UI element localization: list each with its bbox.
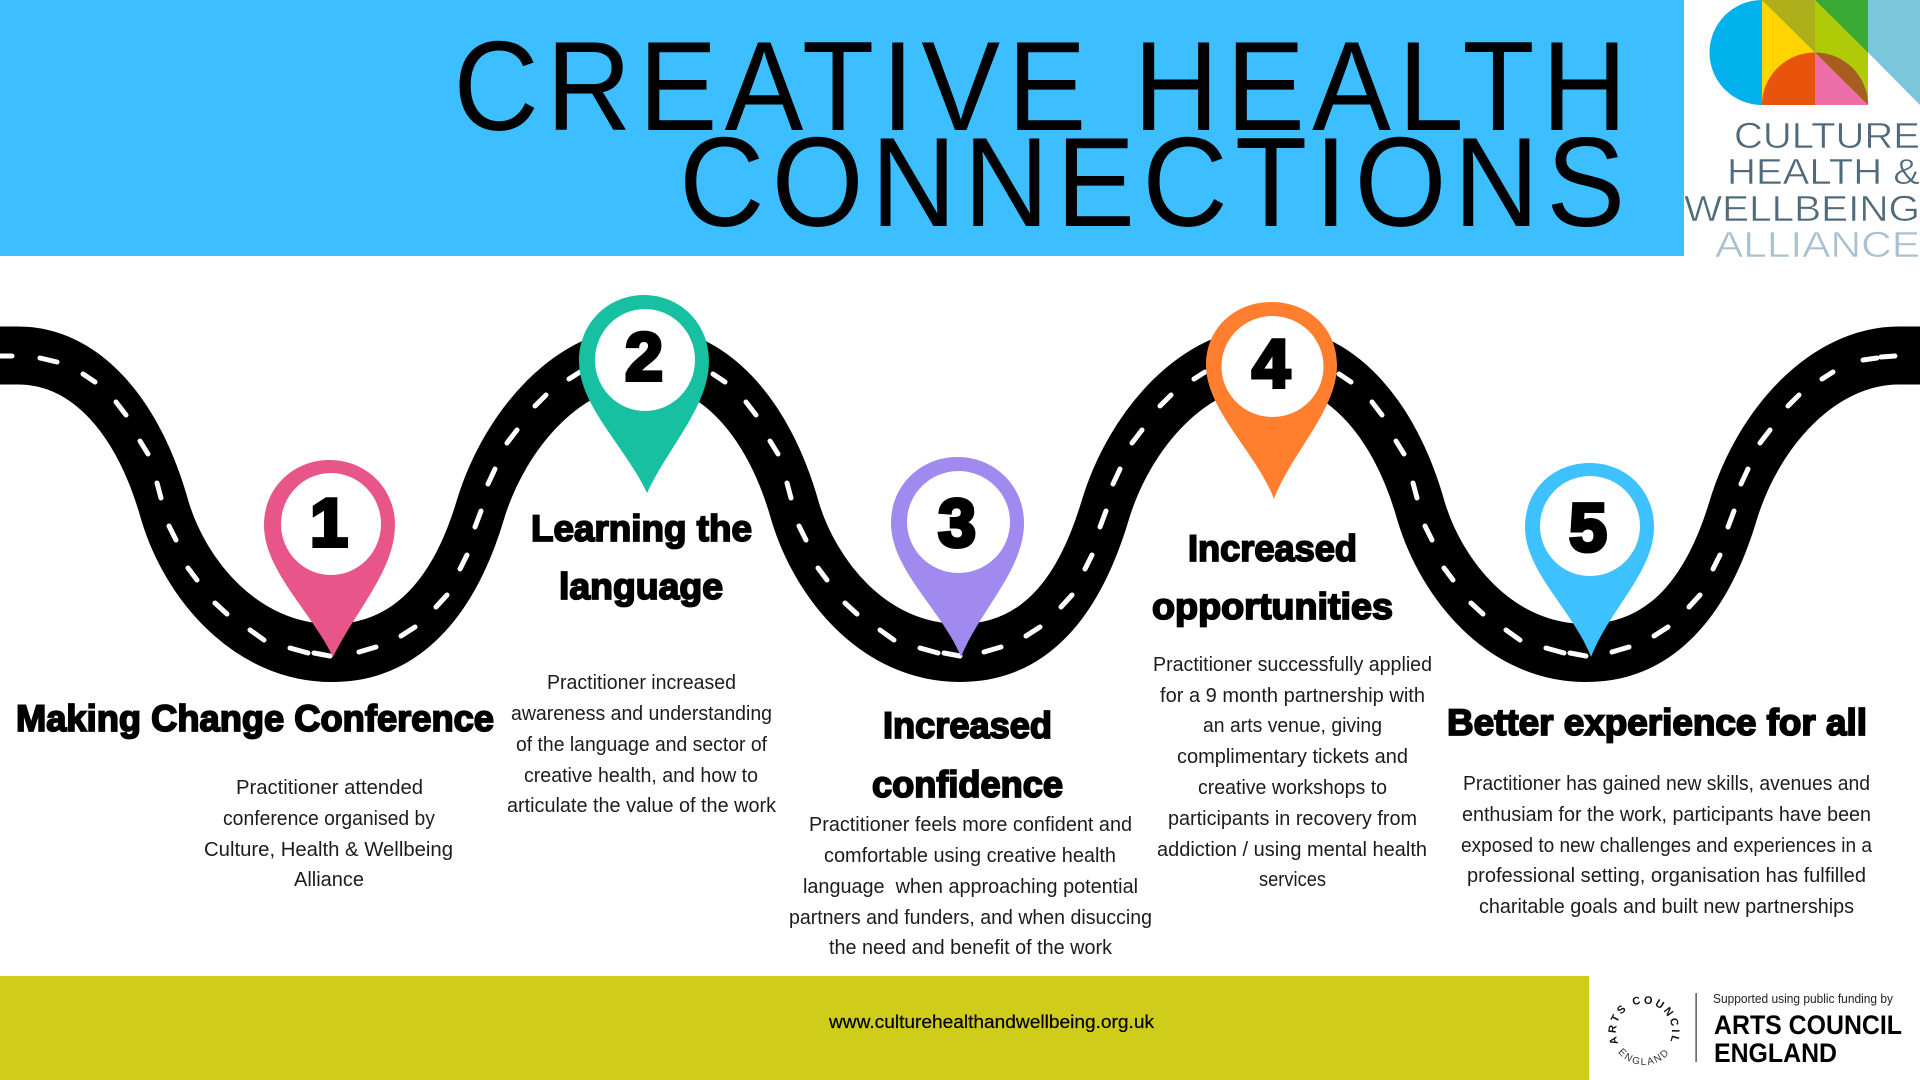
pin 2 xyxy=(579,295,709,493)
road surface xyxy=(0,356,1920,653)
step 5 description: professional setting, organisation has fulfilled xyxy=(1467,865,1866,887)
step 5 description: charitable goals and built new partnerships xyxy=(1479,896,1854,918)
step 3 description: language when approaching potential xyxy=(803,876,1138,898)
logo wordmark: CULTURE xyxy=(1734,115,1920,156)
step 4 description: complimentary tickets and xyxy=(1177,746,1408,768)
step 2 description xyxy=(507,672,777,817)
logo wordmark: HEALTH & xyxy=(1727,151,1920,192)
pin 1 xyxy=(264,460,395,657)
lane dashes xyxy=(0,356,1895,656)
step 2 description: articulate the value of the work xyxy=(507,795,777,817)
Arts Council England logo xyxy=(1608,991,1902,1068)
roundel: ARTS COUNCIL xyxy=(1608,996,1680,1044)
step 4 heading xyxy=(1152,528,1393,627)
footer band xyxy=(0,976,1589,1080)
step 1 description xyxy=(204,777,453,891)
pin 4: 4 xyxy=(1252,326,1290,402)
step 3 heading: Increased xyxy=(883,705,1052,746)
step 3 description: Practitioner feels more confident and xyxy=(809,814,1132,836)
title: CREATIVE HEALTH xyxy=(454,15,1627,157)
step 4 description: Practitioner successfully applied xyxy=(1153,654,1432,676)
step 4 text xyxy=(1152,528,1432,891)
roundel: ENGLAND xyxy=(1618,1048,1668,1065)
logo wordmark: WELLBEING xyxy=(1684,188,1920,229)
step 4 description: an arts venue, giving xyxy=(1203,715,1382,737)
pin 2: 2 xyxy=(625,319,663,395)
step 2 heading xyxy=(531,508,752,607)
step 4 description: services xyxy=(1259,869,1326,891)
step 3 text xyxy=(789,705,1152,959)
title: CONNECTIONS xyxy=(679,111,1625,253)
step 2 heading: Learning the xyxy=(531,508,752,549)
step 3 description: the need and benefit of the work xyxy=(829,937,1113,959)
step 5 description xyxy=(1461,773,1873,918)
step 3 description xyxy=(789,814,1152,959)
step 4 description: creative workshops to xyxy=(1198,777,1387,799)
step 1 description: Culture, Health & Wellbeing xyxy=(204,839,453,861)
step 3 heading xyxy=(872,705,1063,805)
step 5 heading: Better experience for all xyxy=(1447,702,1867,743)
funding statement: Supported using public funding by xyxy=(1713,991,1893,1006)
step 5 text xyxy=(1447,702,1873,918)
step 3 heading: confidence xyxy=(872,764,1063,805)
step 4 description: participants in recovery from xyxy=(1168,808,1417,830)
step 3 description: partners and funders, and when disuccing xyxy=(789,907,1152,929)
step 4 description xyxy=(1153,654,1432,891)
pin 5 xyxy=(1525,463,1654,657)
winding road xyxy=(0,356,1920,656)
step 1 description: Alliance xyxy=(294,869,364,891)
step 1 heading: Making Change Conference xyxy=(16,698,494,739)
pin 3: 3 xyxy=(938,485,976,561)
step 2 description: awareness and understanding xyxy=(511,703,772,725)
pin 4 xyxy=(1206,302,1337,499)
step 1 description: conference organised by xyxy=(223,808,435,830)
logo wordmark: ALLIANCE xyxy=(1715,224,1920,265)
header band xyxy=(0,0,1684,256)
logo: Culture Health & Wellbeing Alliance xyxy=(1684,0,1920,265)
funding statement: ENGLAND xyxy=(1714,1038,1837,1068)
step 5 description: Practitioner has gained new skills, avenues and xyxy=(1463,773,1870,795)
step 2 description: Practitioner increased xyxy=(547,672,736,694)
step 2 heading: language xyxy=(559,566,723,607)
step 5 description: exposed to new challenges and experiences in a xyxy=(1461,835,1873,857)
step 2 description: creative health, and how to xyxy=(524,765,758,787)
roundel xyxy=(1608,996,1680,1065)
title xyxy=(454,15,1627,253)
logo mark xyxy=(1710,0,1920,105)
step 4 description: addiction / using mental health xyxy=(1157,839,1427,861)
website link: www.culturehealthandwellbeing.org.uk xyxy=(828,1012,1155,1032)
step 4 heading: Increased xyxy=(1188,528,1357,569)
step 2 description: of the language and sector of xyxy=(516,734,767,756)
step 3 description: comfortable using creative health xyxy=(824,845,1116,867)
pin 1: 1 xyxy=(310,485,348,561)
step 1 description: Practitioner attended xyxy=(236,777,423,799)
step 2 text xyxy=(507,508,777,817)
funding statement: ARTS COUNCIL xyxy=(1714,1010,1902,1040)
step 4 description: for a 9 month partnership with xyxy=(1160,685,1425,707)
step 1 text xyxy=(16,698,494,891)
pin 5: 5 xyxy=(1569,490,1607,566)
logo wordmark xyxy=(1684,115,1920,265)
step 4 heading: opportunities xyxy=(1152,586,1393,627)
step 5 description: enthusiam for the work, participants have been xyxy=(1462,804,1871,826)
pin 3 xyxy=(891,457,1024,657)
funding statement xyxy=(1713,991,1902,1068)
